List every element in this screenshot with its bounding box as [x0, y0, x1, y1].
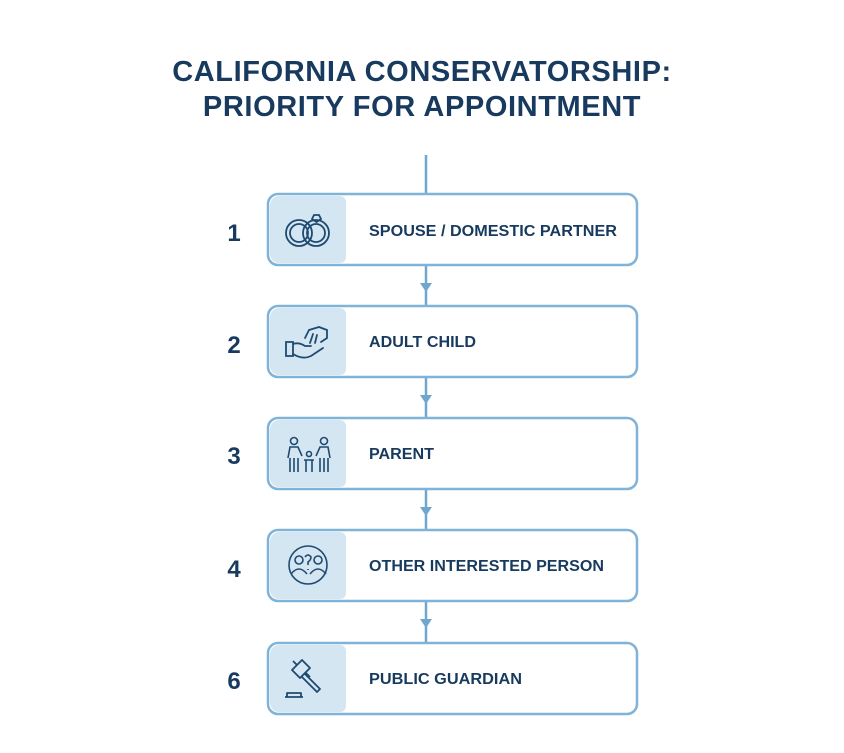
title: CALIFORNIA CONSERVATORSHIP:: [172, 56, 672, 88]
step 1: [227, 194, 637, 265]
step 3: PARENT: [369, 446, 435, 463]
step 4: 4: [227, 556, 241, 583]
step 4: [227, 530, 637, 601]
step 3: [227, 418, 637, 489]
step 4: OTHER INTERESTED PERSON: [369, 558, 604, 575]
step 2: ADULT CHILD: [369, 334, 476, 351]
step 6: [227, 643, 637, 714]
icon: hands: [286, 327, 327, 358]
icon: gavel: [285, 660, 320, 697]
step 1: SPOUSE / DOMESTIC PARTNER: [369, 223, 617, 240]
step 6: PUBLIC GUARDIAN: [369, 671, 522, 688]
connector line: [420, 155, 432, 645]
icon: people with question: [289, 546, 327, 584]
step 2: 2: [227, 332, 241, 359]
step 3: 3: [227, 443, 241, 470]
icon: rings: [286, 215, 329, 246]
step 1: 1: [227, 220, 241, 247]
step 2: [227, 306, 637, 377]
title: [172, 56, 672, 123]
title: PRIORITY FOR APPOINTMENT: [203, 91, 641, 123]
icon: family: [288, 438, 330, 472]
step 6: 6: [227, 668, 241, 695]
